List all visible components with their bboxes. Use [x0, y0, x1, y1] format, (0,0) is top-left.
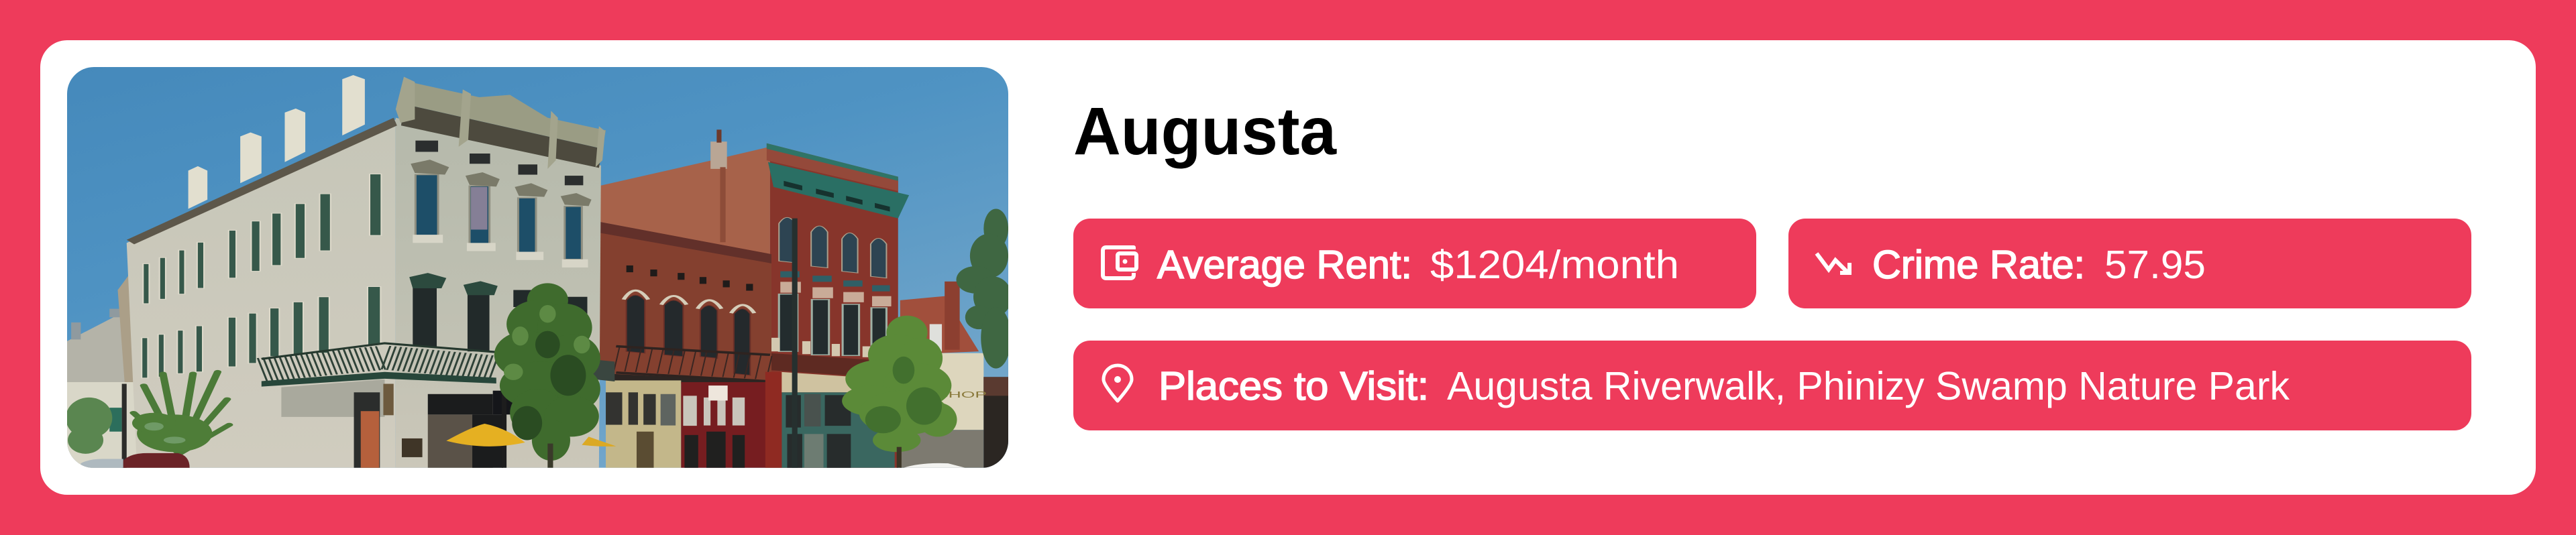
stat: places to visit	[1073, 341, 2471, 430]
label: crime rate: Crime Rate:	[1872, 243, 2085, 287]
white corner building	[127, 119, 396, 468]
mid balcony railing	[616, 359, 770, 368]
value: crime rate: 57.95	[2104, 243, 2206, 287]
far left buildings	[67, 312, 130, 468]
storefront	[354, 392, 380, 468]
side cornice	[127, 118, 397, 244]
side windows	[142, 174, 381, 378]
arched windows	[779, 217, 886, 278]
label: places to visit: Places to Visit:	[1159, 364, 1429, 408]
mid brick building	[599, 222, 771, 382]
front windows	[415, 175, 582, 259]
photo: Augusta historic buildings: SHOP	[936, 390, 987, 400]
front balcony railing	[262, 357, 496, 370]
umbrellas	[446, 424, 525, 447]
label: average rent: Average Rent:	[1157, 243, 1412, 287]
stat: crime rate	[1788, 219, 2471, 308]
front cornice	[404, 82, 606, 149]
edge tree right	[956, 209, 1012, 369]
center tree	[494, 283, 600, 461]
icon: wallet	[1103, 247, 1136, 278]
heading: city name: Augusta	[1073, 94, 1337, 169]
street tree right	[842, 316, 957, 452]
palm tree left	[133, 372, 229, 454]
rooftop piers	[189, 75, 365, 209]
value: average rent: $1204/month	[1430, 243, 1679, 287]
tall brick building	[599, 147, 770, 254]
far right buildings	[900, 296, 979, 355]
icon: map pin	[1104, 365, 1132, 401]
stat: average rent	[1073, 219, 1756, 308]
icon: trending down	[1817, 253, 1849, 273]
photo: Augusta historic buildings	[66, 67, 1012, 468]
far left tree	[66, 398, 112, 454]
cars	[123, 453, 190, 468]
value: places to visit: Augusta Riverwalk, Phinizy Swamp Nature Park	[1447, 364, 2290, 408]
